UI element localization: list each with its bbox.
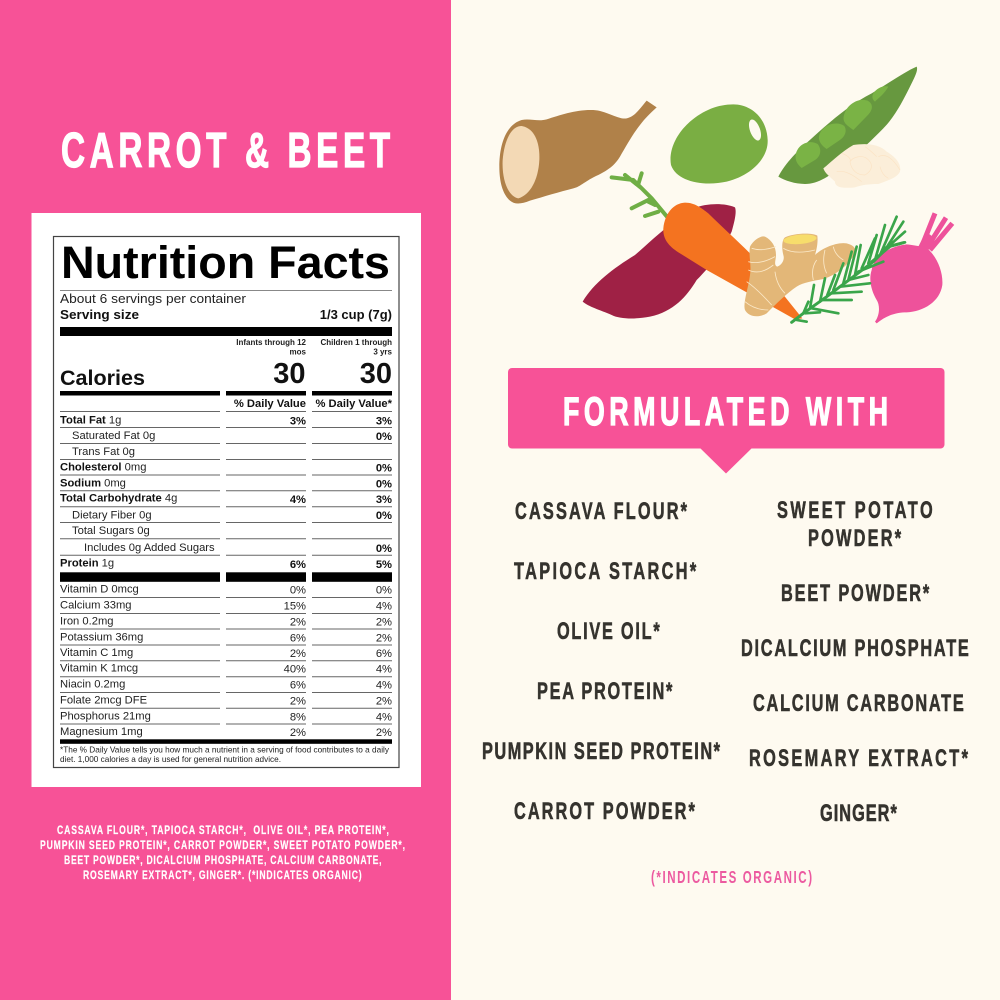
panel: white nutrition card: [32, 213, 421, 787]
ingredient list text: PUMPKIN SEED PROTEIN*, CARROT POWDER*, SWEET POTATO POWDER*,: [40, 840, 405, 852]
vitamin and mineral rows: 40%: [284, 664, 306, 676]
macronutrient rows: Includes 0g Added Sugars: [84, 542, 215, 554]
footnote: diet. 1,000 calories a day is used for general nutrition advice.: [60, 754, 281, 764]
title: Carrot & Beet: CARROT & BEET: [61, 123, 390, 178]
daily value headers: % Daily Value*: [316, 398, 393, 410]
ingredient column: left: PEA PROTEIN*: [537, 678, 672, 705]
vitamin and mineral rows: 4%: [376, 664, 392, 676]
calories section: Calories: [60, 367, 145, 390]
ingredient column: left: PUMPKIN SEED PROTEIN*: [482, 738, 720, 765]
ingredient column: right: [741, 497, 969, 827]
illustration: ingredients: [499, 67, 952, 323]
icon: ginger root: [744, 233, 855, 316]
macronutrient rows: 0%: [376, 478, 392, 490]
vitamin and mineral rows: 6%: [290, 680, 306, 692]
calories section: 3 yrs: [373, 348, 393, 356]
footnote: *The % Daily Value tells you how much a nutrient in a serving of food contributes to a daily: [60, 745, 390, 755]
icon: rosemary sprig: [792, 217, 905, 322]
vitamin and mineral rows: 2%: [290, 695, 306, 707]
ingredient column: right: SWEET POTATO: [777, 497, 933, 524]
vitamin and mineral rows: 2%: [290, 727, 306, 739]
macronutrient rows: Dietary Fiber 0g: [72, 509, 152, 521]
macronutrient rows: 3%: [376, 416, 392, 428]
macronutrient rows: Total Carbohydrate 4g: [60, 493, 177, 505]
macronutrient rows: Total Sugars 0g: [72, 525, 150, 537]
vitamin and mineral rows: 6%: [290, 632, 306, 644]
macronutrient rows: 0%: [376, 543, 392, 555]
vitamin and mineral rows: Potassium 36mg: [60, 631, 143, 643]
vitamin and mineral rows: Phosphorus 21mg: [60, 710, 151, 722]
vitamin and mineral rows: 2%: [376, 632, 392, 644]
ingredient column: right: ROSEMARY EXTRACT*: [749, 745, 968, 772]
icon: beet: [870, 213, 952, 323]
vitamin and mineral rows: 2%: [376, 727, 392, 739]
macronutrient rows: 3%: [290, 416, 306, 428]
ingredient column: left: [482, 498, 720, 825]
icon: pea pod: [778, 67, 917, 188]
vitamin and mineral rows: 6%: [376, 648, 392, 660]
ingredient column: right: POWDER*: [808, 525, 901, 552]
label heading: Nutrition Facts: [61, 237, 390, 288]
vitamin and mineral rows: Iron 0.2mg: [60, 616, 113, 628]
servings information: About 6 servings per container: [60, 291, 247, 306]
vitamin and mineral rows: 4%: [376, 711, 392, 723]
vitamin and mineral rows: 2%: [290, 648, 306, 660]
vitamin and mineral rows: Vitamin K 1mcg: [60, 663, 138, 675]
macronutrient rows: 4%: [290, 494, 306, 506]
calories section: Infants through 12: [236, 338, 307, 347]
ingredient column: left: CARROT POWDER*: [514, 798, 695, 825]
daily value headers: % Daily Value: [234, 398, 306, 410]
vitamin and mineral rows: Vitamin C 1mg: [60, 647, 133, 659]
banner: formulated with: [508, 368, 944, 474]
macronutrient rows: Cholesterol 0mg: [60, 462, 146, 474]
vitamin and mineral rows: 8%: [290, 711, 306, 723]
vitamin and mineral rows: 4%: [376, 600, 392, 612]
organic footnote: (*INDICATES ORGANIC): [651, 869, 812, 888]
macronutrient rows: [60, 414, 392, 571]
macronutrient rows: 6%: [290, 559, 306, 571]
calories section: mos: [290, 348, 307, 356]
ingredient column: right: GINGER*: [820, 800, 897, 827]
calories section: 30: [273, 358, 306, 390]
calories section: Children 1 through: [320, 338, 392, 347]
vitamin and mineral rows: 0%: [376, 585, 392, 597]
macronutrient rows: 0%: [376, 431, 392, 443]
vitamin and mineral rows: Niacin 0.2mg: [60, 679, 125, 691]
ingredient column: left: CASSAVA FLOUR*: [515, 498, 687, 525]
nutrition facts label: [54, 236, 399, 768]
macronutrient rows: 3%: [376, 494, 392, 506]
ingredient column: right: DICALCIUM PHOSPHATE: [741, 635, 969, 662]
ingredient column: left: TAPIOCA STARCH*: [514, 558, 696, 585]
footnote: [60, 745, 390, 764]
vitamin and mineral rows: 0%: [290, 585, 306, 597]
macronutrient rows: 0%: [376, 462, 392, 474]
macronutrient rows: Protein 1g: [60, 558, 114, 570]
icon: carrot: [612, 173, 802, 319]
macronutrient rows: Saturated Fat 0g: [72, 430, 155, 442]
macronutrient rows: 5%: [376, 559, 392, 571]
icon: cassava root: [499, 101, 657, 204]
ingredient list text: ROSEMARY EXTRACT*, GINGER*. (*INDICATES ORGANIC): [83, 870, 362, 882]
calories section: 30: [360, 358, 392, 390]
vitamin and mineral rows: 4%: [376, 680, 392, 692]
vitamin and mineral rows: Folate 2mcg DFE: [60, 694, 147, 706]
panel: pink left column: [0, 0, 451, 1000]
vitamin and mineral rows: [60, 584, 392, 739]
servings information: [60, 291, 392, 322]
banner: formulated with: FORMULATED WITH: [563, 390, 888, 434]
macronutrient rows: Total Fat 1g: [60, 414, 121, 426]
macronutrient rows: 0%: [376, 510, 392, 522]
vitamin and mineral rows: 2%: [290, 616, 306, 628]
vitamin and mineral rows: 2%: [376, 695, 392, 707]
ingredient column: right: BEET POWDER*: [781, 580, 929, 607]
servings information: 1/3 cup (7g): [320, 307, 392, 322]
ingredient column: right: CALCIUM CARBONATE: [753, 690, 964, 717]
ingredient list text: CASSAVA FLOUR*, TAPIOCA STARCH*, OLIVE OIL*, PEA PROTEIN*,: [57, 825, 389, 837]
vitamin and mineral rows: Calcium 33mg: [60, 600, 132, 612]
macronutrient rows: Trans Fat 0g: [72, 446, 135, 458]
macronutrient rows: Sodium 0mg: [60, 477, 126, 489]
icon: green olive: [671, 104, 768, 184]
vitamin and mineral rows: Magnesium 1mg: [60, 726, 143, 738]
vitamin and mineral rows: 15%: [284, 600, 306, 612]
vitamin and mineral rows: Vitamin D 0mcg: [60, 584, 139, 596]
calories section: [60, 338, 393, 390]
daily value headers: [234, 398, 393, 410]
icon: pumpkin seed pile: [823, 144, 900, 188]
vitamin and mineral rows: 2%: [376, 616, 392, 628]
servings information: Serving size: [60, 307, 139, 322]
icon: sweet potato: [583, 204, 736, 318]
ingredient list text: BEET POWDER*, DICALCIUM PHOSPHATE, CALCIUM CARBONATE,: [64, 855, 382, 867]
ingredient list text: [40, 825, 405, 882]
ingredient column: left: OLIVE OIL*: [557, 618, 660, 645]
